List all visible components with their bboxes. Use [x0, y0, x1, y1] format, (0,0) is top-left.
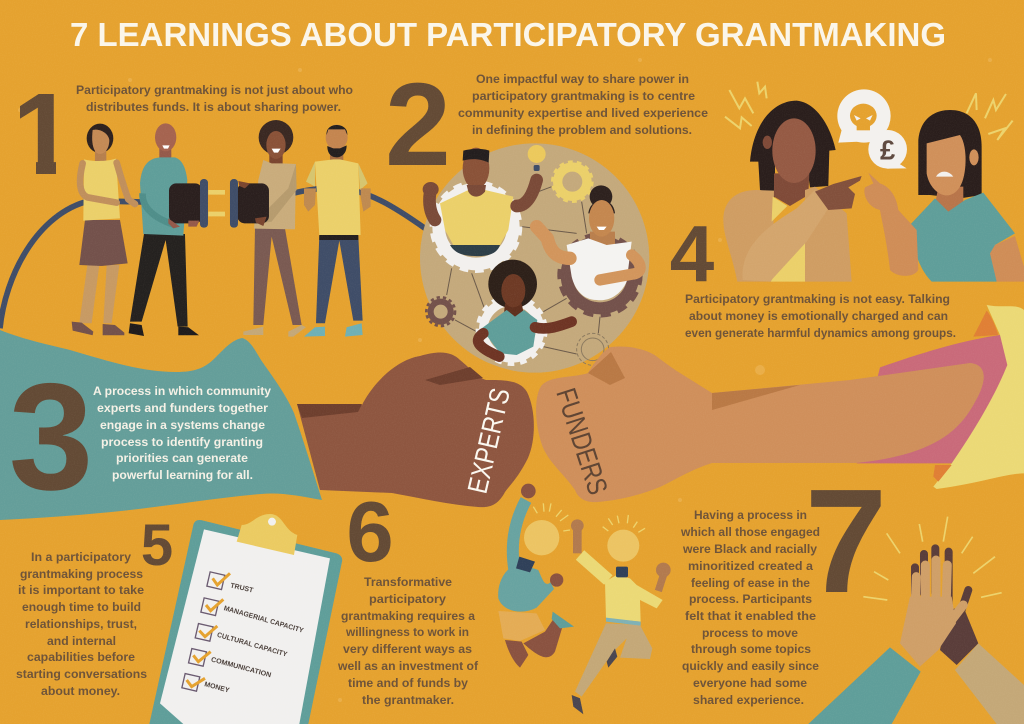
number 5: 5 — [141, 513, 173, 578]
number 7: 7 — [805, 459, 887, 624]
text: learning 2: participatory grantmaking is to centre — [472, 89, 695, 103]
text: learning 6: the grantmaker. — [362, 693, 454, 707]
text: learning 5: enough time to build — [22, 600, 141, 614]
scene: three people in gears — [420, 143, 649, 373]
text: learning 7: felt that it enabled the — [685, 609, 816, 623]
motion rays — [863, 517, 1002, 600]
text: learning 7: minoritized created a — [688, 559, 813, 573]
text: learning 6: grantmaking requires a — [341, 609, 475, 623]
text: learning 7: were Black and racially — [682, 542, 817, 556]
text: learning 3: A process in which community — [93, 384, 271, 398]
text: learning 1 — [76, 83, 353, 114]
text: learning 7: shared experience. — [693, 693, 804, 707]
icon: yellow gear — [553, 162, 592, 201]
text: learning 2: One impactful way to share power in — [476, 72, 689, 86]
person: jumper in teal — [498, 484, 574, 668]
text: learning 4: Participatory grantmaking is not easy. Talking — [685, 292, 950, 306]
text: learning 1: Participatory grantmaking is not just about who — [76, 83, 353, 97]
text: learning 3: priorities can generate — [116, 451, 248, 465]
title: 7 LEARNINGS ABOUT PARTICIPATORY GRANTMAKING — [70, 16, 946, 53]
callout: skull speech bubble — [837, 89, 891, 143]
teal sleeve — [808, 647, 921, 724]
text: learning 7 — [680, 508, 820, 707]
text: learning 7: quickly and easily since — [682, 659, 819, 673]
text: learning 5: about money. — [41, 684, 120, 698]
text: learning 2: in defining the problem and solutions. — [472, 123, 692, 137]
text: learning 7: process. Participants — [689, 592, 812, 606]
lightning bolts — [725, 82, 1013, 140]
checklist: COMMUNICATION — [210, 656, 272, 679]
text: learning 7: feeling of ease in the — [691, 576, 810, 590]
number 3: 3 — [9, 352, 93, 522]
panel: teal sleeve — [0, 330, 322, 520]
person: man in yellow — [423, 145, 546, 271]
scene: clipboard — [149, 514, 342, 724]
fist: experts — [297, 353, 534, 507]
number 4: 4 — [670, 209, 715, 298]
checklist: CULTURAL CAPACITY — [216, 632, 288, 659]
scene: four people connecting a plug — [0, 120, 425, 337]
fist: funders — [536, 347, 984, 502]
text: learning 5: it is important to take — [18, 583, 144, 597]
person: man with beard — [304, 125, 371, 337]
board — [149, 520, 342, 724]
text: learning 5 — [16, 550, 147, 698]
icon: small brown gear — [426, 297, 455, 326]
tan sleeve — [955, 643, 1024, 724]
checklist: MONEY — [203, 681, 230, 695]
text: learning 6: participatory — [369, 592, 446, 606]
checklist — [182, 572, 304, 695]
checklist: MANAGERIAL CAPACITY — [223, 605, 304, 635]
cable — [0, 188, 425, 328]
person: jumper in yellow — [571, 515, 671, 714]
text: learning 6: very different ways as — [343, 642, 472, 656]
text: learning 5: and internal — [47, 634, 116, 648]
scene: high five — [808, 517, 1024, 724]
text: learning 3 — [93, 384, 271, 482]
callout: pound speech bubble — [868, 130, 907, 169]
text: learning 6: well as an investment of — [337, 659, 479, 673]
text: learning 3: powerful learning for all. — [112, 468, 253, 482]
checklist: TRUST — [230, 582, 255, 595]
label: funders: FUNDERS — [550, 384, 614, 498]
text: learning 3: experts and funders together — [97, 401, 268, 415]
text: learning 5: relationships, trust, — [25, 617, 137, 631]
text: learning 7: everyone had some — [693, 676, 807, 690]
paper — [160, 529, 330, 724]
person: woman in teal — [864, 110, 1024, 282]
person: woman in white — [537, 185, 640, 315]
text: learning 7: which all those engaged — [680, 525, 820, 539]
text: learning 2 — [458, 72, 708, 137]
person: bald man in teal — [129, 123, 199, 336]
text: learning 5: grantmaking process — [20, 567, 143, 581]
text: learning 4: even generate harmful dynamics among groups. — [685, 326, 956, 340]
scene: two jumping people with lightbulb heads — [498, 484, 671, 714]
network lines — [447, 187, 600, 354]
text: learning 5: In a participatory — [31, 550, 131, 564]
callout: pound speech bubble: £ — [880, 134, 895, 165]
number 1: 1 — [11, 69, 75, 199]
person: man with dreadlocks — [723, 101, 862, 282]
text: learning 5: capabilities before — [27, 650, 135, 664]
text: learning 3: process to identify granting — [101, 435, 263, 449]
label: experts: EXPERTS — [462, 385, 516, 496]
text: learning 4 — [685, 292, 956, 340]
text: learning 6 — [337, 575, 479, 707]
plug and socket — [168, 179, 269, 228]
text: learning 1: distributes funds. It is about sharing power. — [86, 100, 341, 114]
text: learning 7: Having a process in — [694, 508, 807, 522]
text: learning 7: through some topics — [691, 642, 811, 656]
number 2: 2 — [385, 59, 451, 191]
person: woman in teal — [478, 260, 572, 364]
person: woman with afro — [243, 120, 306, 337]
text: learning 5: starting conversations — [16, 667, 147, 681]
tan circle — [420, 143, 649, 373]
text: learning 2: community expertise and lived experience — [458, 106, 708, 120]
text: learning 6: Transformative — [364, 575, 452, 589]
scene: two people arguing — [723, 82, 1024, 282]
back hand — [915, 548, 978, 665]
text: learning 6: time and of funds by — [348, 676, 468, 690]
icon: outline gear — [577, 333, 609, 365]
text: learning 6: willingness to work in — [345, 625, 469, 639]
text: learning 3: engage in a systems change — [100, 418, 265, 432]
yellow sleeve with pink cuff — [857, 305, 1024, 489]
person: woman in skirt — [72, 124, 135, 335]
text: learning 7: process to move — [702, 626, 798, 640]
text: learning 4: about money is emotionally charged and can — [689, 309, 948, 323]
number 6: 6 — [346, 485, 394, 580]
clip — [237, 514, 297, 555]
front hand — [900, 560, 963, 667]
